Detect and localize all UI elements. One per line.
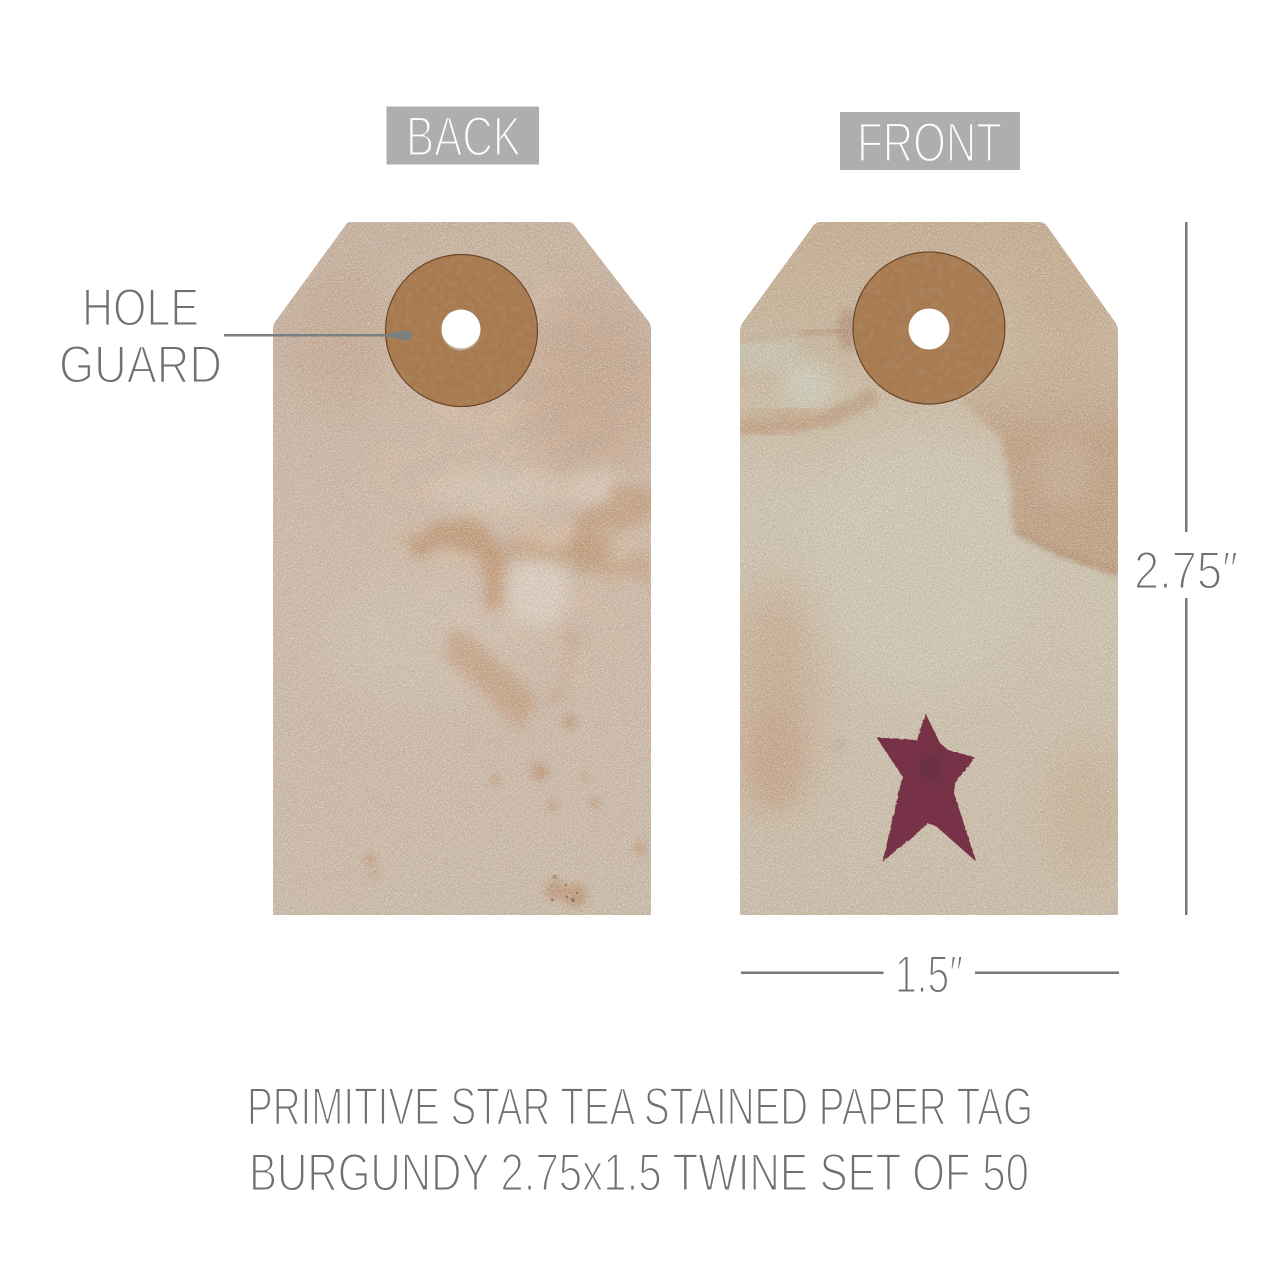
- front tag paper with stains: [729, 220, 1125, 920]
- panel: back tag: [270, 220, 660, 920]
- back tag paper with stains: [270, 220, 660, 920]
- dimension: width: 1.5″: [895, 946, 963, 1004]
- callout text: [59, 278, 222, 394]
- back hole guard: [385, 254, 539, 408]
- panel: front tag: [729, 220, 1125, 920]
- arrow: leader to hole guard: [224, 330, 412, 340]
- callout: hole guard: [59, 278, 412, 394]
- label: back: BACK: [406, 104, 521, 168]
- callout text: GUARD: [59, 336, 222, 394]
- title: BURGUNDY 2.75x1.5 TWINE SET OF 50: [249, 1144, 1029, 1202]
- front hole guard: [853, 252, 1005, 404]
- callout text: HOLE: [82, 278, 199, 338]
- icon: primitive star: [876, 714, 976, 862]
- title: [247, 1078, 1033, 1202]
- dimension: height: 2.75″: [1134, 542, 1238, 600]
- label: front: FRONT: [857, 110, 1002, 174]
